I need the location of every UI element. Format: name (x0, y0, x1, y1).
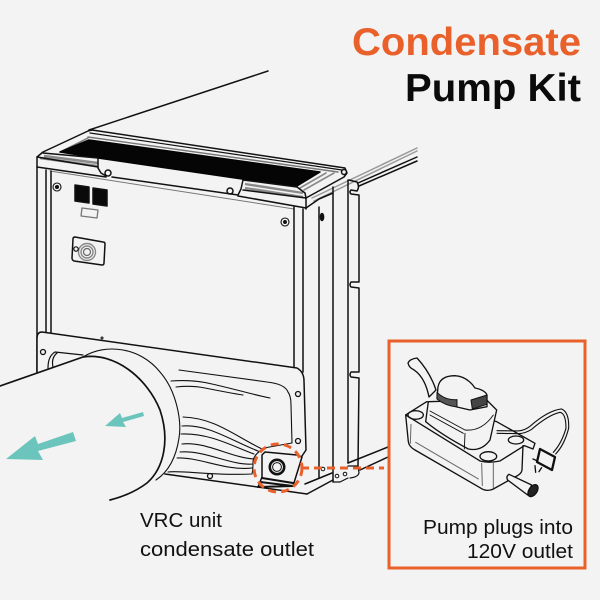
top frame (37, 130, 347, 209)
plug (537, 449, 555, 470)
VRC unit illustration (0, 71, 417, 520)
motor housing (426, 400, 497, 449)
cabinet verticals (37, 158, 388, 494)
title: Pump Kit (405, 67, 581, 110)
gray rail strips (40, 156, 98, 166)
pump caption: Pump plugs into (423, 517, 573, 539)
dashed connector (301, 466, 384, 470)
power cord (497, 409, 569, 454)
front rail with screws (98, 158, 243, 195)
duct back edge and wall lines (89, 71, 417, 201)
motor cap (437, 376, 487, 410)
icon: condensate pump (406, 358, 569, 498)
title: Condensate (352, 21, 581, 64)
pump caption: 120V outlet (467, 541, 573, 563)
drain tube (507, 474, 532, 495)
tube (408, 358, 436, 397)
panel: pump inset (389, 341, 585, 568)
condensate outlet (258, 452, 302, 487)
airflow arrow: large (6, 432, 76, 460)
flange plate (37, 332, 307, 494)
louvers (179, 370, 292, 448)
title (352, 21, 581, 110)
pump caption (423, 517, 573, 563)
filter slot (60, 140, 320, 186)
circular duct (0, 349, 180, 520)
tank (406, 402, 535, 462)
outlet caption (140, 510, 314, 561)
control panel (53, 183, 107, 265)
dashed highlight circle (254, 444, 302, 492)
outlet caption: condensate outlet (140, 539, 314, 561)
airflow arrow: small (105, 412, 144, 427)
outlet caption: VRC unit (140, 510, 222, 532)
